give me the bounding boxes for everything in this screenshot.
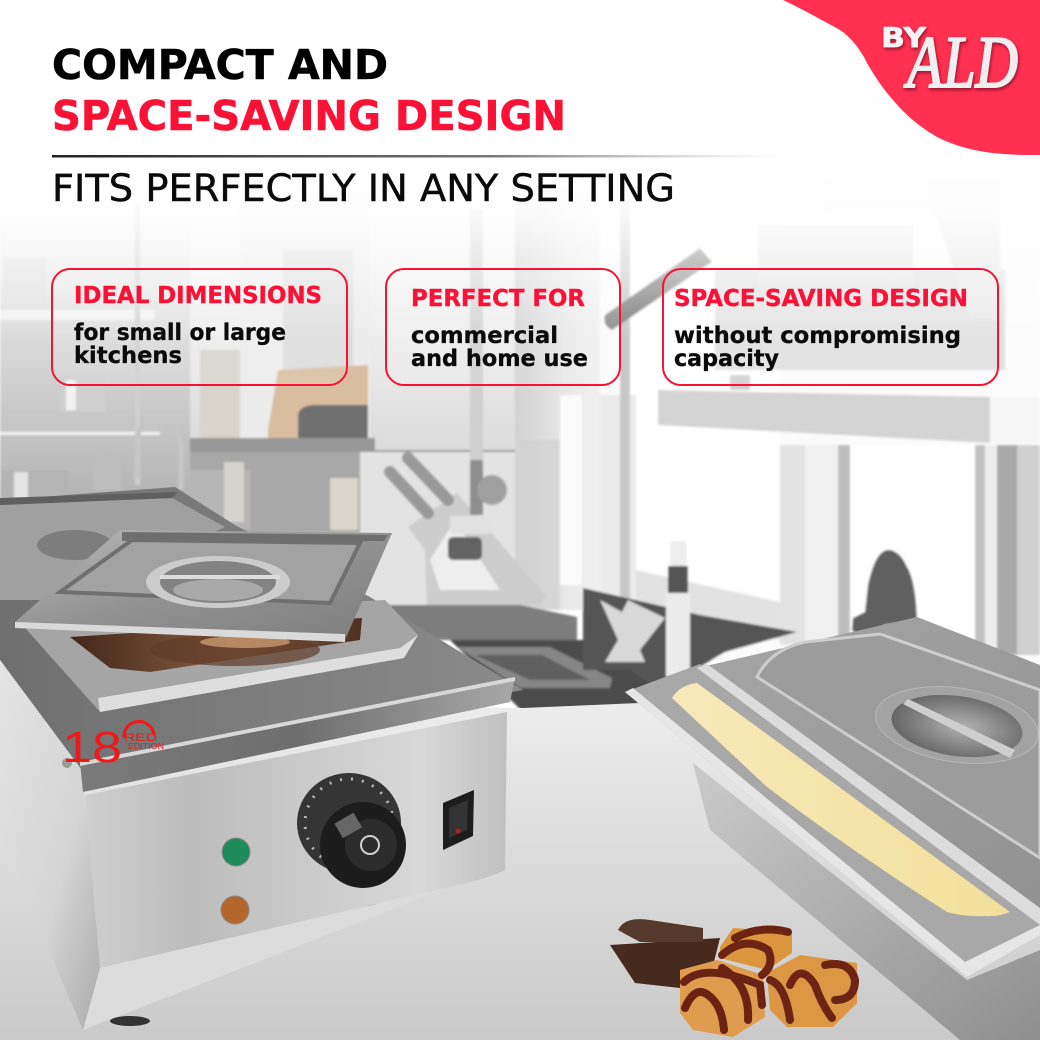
callout: space-saving design: without compromising (674, 323, 961, 349)
lid (15, 530, 392, 642)
callout: perfect for (386, 269, 620, 385)
title: COMPACT AND (52, 41, 388, 89)
counter, sink and splash (383, 588, 797, 712)
callout: ideal dimensions: for small or large (74, 320, 286, 346)
title: SPACE-SAVING DESIGN (52, 92, 566, 140)
brand mark: 18 (62, 723, 122, 772)
soap pump (666, 541, 690, 677)
callout: perfect for: PERFECT FOR (411, 286, 585, 312)
left wire shelving (0, 190, 190, 505)
callout: perfect for: commercial (411, 323, 558, 349)
callout: ideal dimensions (52, 269, 347, 385)
faucet taps (600, 600, 665, 662)
indicator lights (221, 838, 250, 924)
pan lid (697, 617, 1040, 925)
pan rim and melted chocolate (18, 600, 418, 712)
red logo corner shape (783, 0, 1040, 155)
callout: perfect for: and home use (411, 346, 588, 372)
logo: By ALD (881, 21, 1018, 104)
temperature dial (297, 773, 406, 888)
rubber gloves (852, 550, 917, 640)
floor (0, 700, 1040, 1040)
brand mark: RED (124, 732, 157, 744)
custard (672, 683, 1010, 916)
window area (600, 180, 1040, 660)
brand mark (62, 721, 164, 772)
callout: space-saving design: SPACE-SAVING DESIGN (674, 286, 968, 312)
brand mark: EDITION (128, 742, 164, 751)
grill handle (604, 248, 712, 330)
callout: ideal dimensions: kitchens (74, 343, 182, 369)
counter (190, 438, 515, 533)
faucet pole (620, 200, 630, 600)
callout: space-saving design: capacity (674, 346, 779, 372)
chocolate and caramel pieces (610, 919, 857, 1037)
melting machine (0, 487, 523, 1030)
right food pan with custard (625, 617, 1040, 1040)
divider rule (52, 155, 782, 158)
logo: By ALD: BY (881, 21, 927, 54)
callout: ideal dimensions: IDEAL DIMENSIONS (74, 283, 322, 309)
title (52, 41, 566, 140)
subtitle: FITS PERFECTLY IN ANY SETTING (52, 167, 675, 210)
knife block panel (360, 210, 547, 607)
rocker switch (443, 790, 474, 850)
callout: space-saving design (663, 269, 998, 385)
tiled wall (375, 190, 525, 450)
blender and jars (190, 190, 380, 440)
wall shelf (658, 175, 1040, 443)
